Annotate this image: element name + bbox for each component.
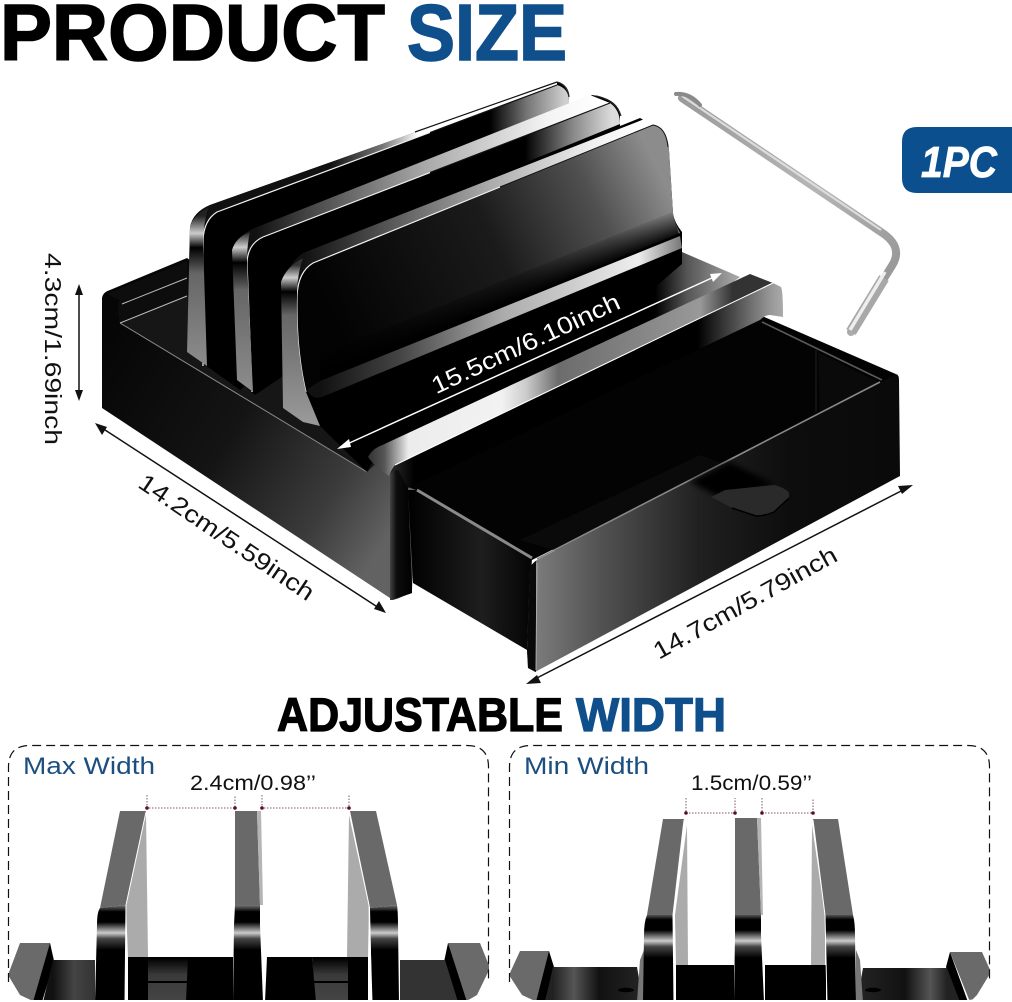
drawer inside	[400, 316, 898, 560]
drawer frame	[368, 274, 783, 600]
drawer pull tab	[690, 462, 789, 516]
badge: 1PC	[902, 127, 1012, 193]
dimension: drawer 14.7cm arrow and label: 14.7cm/5.79inch	[649, 542, 842, 665]
product: stand tray with drawer	[102, 82, 900, 672]
label: min width: Min Width	[524, 753, 649, 780]
dashed border	[8, 746, 488, 982]
panel: min width	[509, 746, 991, 1002]
label: max width: Max Width	[23, 753, 155, 780]
tray strip between stand and drawer	[320, 252, 740, 472]
measurement: 2.4cm	[145, 772, 351, 810]
dimension: depth 15.5cm arrow and label: 15.5cm/6.10inch	[427, 289, 624, 400]
heading: adjustable width: WIDTH	[576, 688, 726, 741]
title: product size	[0, 0, 567, 77]
middle stand	[232, 95, 621, 395]
heading: adjustable width	[277, 688, 726, 741]
dimension: drawer 14.7cm arrow and label	[526, 485, 913, 684]
dimension: height 4.3cm arrow and label	[40, 253, 83, 445]
tray body	[102, 258, 420, 600]
icon: hex wrench tool	[676, 94, 896, 332]
dimension: width 14.2cm arrow and label: 14.2cm/5.59inch	[133, 469, 319, 607]
stand view at max width	[8, 811, 490, 1002]
measurement: 2.4cm: 2.4cm/0.98’’	[190, 772, 316, 795]
panel: max width	[8, 746, 490, 1002]
badge: 1PC: 1PC	[921, 138, 998, 187]
dimension: width 14.2cm arrow and label	[95, 423, 386, 613]
drawer left side	[408, 490, 532, 650]
front stand	[281, 118, 682, 426]
drawer front panel	[527, 375, 900, 672]
measurement: 1.5cm: 1.5cm/0.59’’	[691, 772, 812, 795]
heading: adjustable width: ADJUSTABLE	[277, 688, 563, 741]
dimension: height 4.3cm arrow and label: 4.3cm/1.69inch	[40, 253, 66, 445]
measurement: 1.5cm	[684, 772, 815, 815]
dashed border	[510, 746, 990, 982]
dimension: depth 15.5cm arrow and label	[337, 273, 722, 449]
back stand	[187, 82, 569, 390]
stand view at min width	[509, 818, 991, 1002]
